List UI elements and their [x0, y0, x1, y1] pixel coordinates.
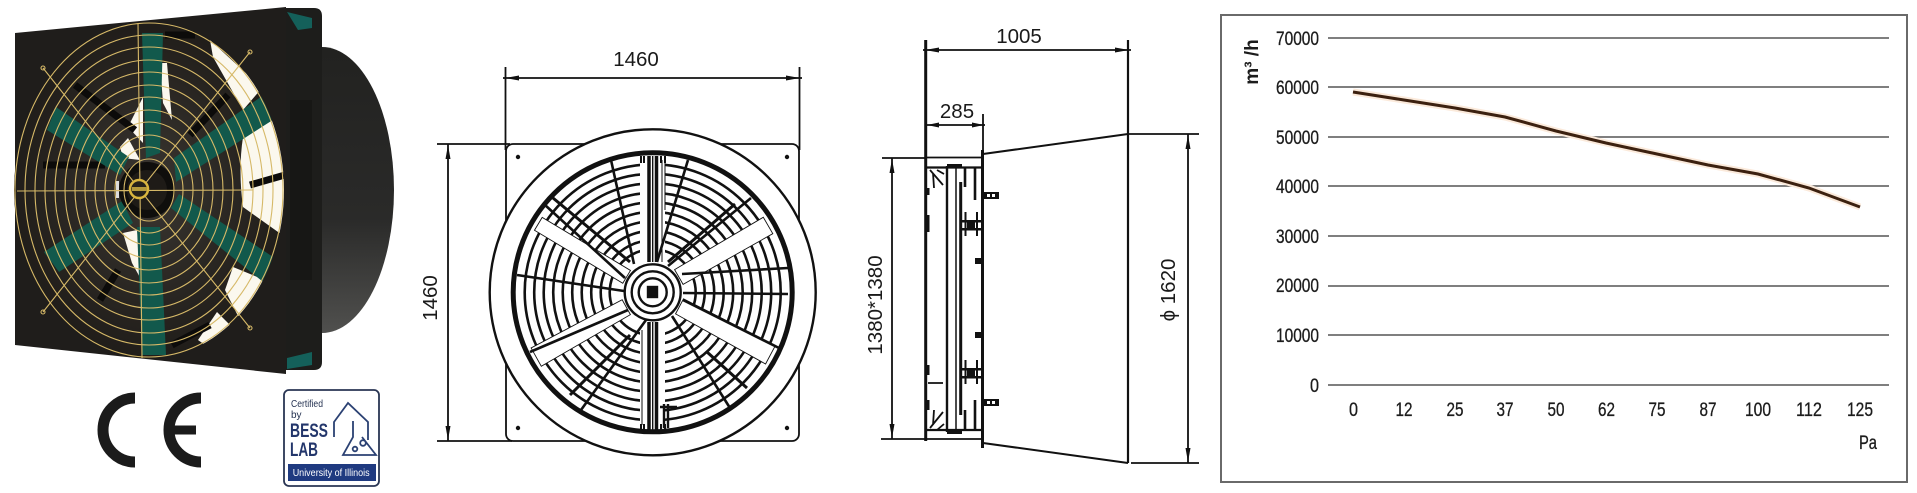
BESS lab certification badge: BESS: [290, 421, 328, 442]
y axis unit: m³ /h: [1242, 39, 1263, 85]
x axis unit: Pa: [1859, 433, 1877, 454]
y axis labels: 10000: [1276, 326, 1319, 347]
BESS lab certification badge: [284, 390, 379, 486]
inner frame detail: [928, 166, 975, 432]
frame height dimension: 1380*1380: [864, 255, 887, 355]
grid lines: [1328, 38, 1889, 385]
side body outline: [926, 40, 1128, 463]
gold centre badge: [130, 180, 148, 198]
y axis labels: 40000: [1276, 177, 1319, 198]
front dimension width: [503, 48, 802, 150]
x axis labels: 75: [1648, 400, 1666, 421]
x axis labels: 62: [1598, 400, 1615, 421]
front dimension height: [419, 144, 512, 441]
frame depth dimension: [926, 100, 985, 150]
wire guard: [15, 23, 283, 358]
performance chart: [1221, 15, 1907, 482]
airflow curve: [1353, 92, 1860, 207]
frame depth dimension: 285: [940, 100, 974, 123]
side view drawing: [864, 25, 1199, 463]
mounting holes: [516, 155, 789, 430]
teal blades: [44, 33, 279, 355]
square mounting plate: [506, 144, 799, 441]
x axis labels: 112: [1796, 400, 1822, 421]
motor terminal: [660, 404, 677, 428]
y axis labels: 0: [1310, 376, 1319, 397]
y axis labels: [1276, 29, 1319, 397]
fan front panel: [15, 7, 286, 374]
x axis labels: [1349, 400, 1873, 421]
x axis labels: 25: [1446, 400, 1464, 421]
BESS lab certification badge: University of Illinois: [293, 468, 370, 479]
x axis labels: 100: [1745, 400, 1771, 421]
x axis labels: 12: [1396, 400, 1412, 421]
guard rings: [513, 153, 792, 432]
fan opening with blades: [14, 22, 285, 358]
x axis labels: 50: [1548, 400, 1564, 421]
outer ring: [490, 129, 816, 455]
y axis labels: 20000: [1276, 276, 1319, 297]
teal brackets: [287, 12, 312, 369]
house and flask icon: [334, 403, 376, 455]
overall depth dimension: 1005: [996, 25, 1042, 48]
frame height dimension: [864, 158, 926, 439]
overall depth dimension: [923, 25, 1131, 52]
fan blades: [531, 156, 775, 428]
side brackets: [960, 192, 999, 406]
guard spokes: [517, 160, 788, 410]
white background seen through fan: [120, 40, 285, 345]
vertical support posts: [641, 156, 665, 432]
y axis labels: 60000: [1276, 78, 1319, 99]
chart frame: [1221, 15, 1907, 482]
hub: [119, 162, 175, 218]
BESS lab certification badge: Certified: [291, 399, 323, 410]
fan rear panel: [286, 8, 322, 370]
y axis labels: 30000: [1276, 227, 1319, 248]
front view drawing: [419, 48, 816, 455]
dome cone outline: [983, 134, 1128, 463]
y axis labels: 70000: [1276, 29, 1319, 50]
fan dome: [250, 47, 394, 333]
x axis labels: 0: [1349, 400, 1358, 421]
x axis labels: 125: [1847, 400, 1873, 421]
BESS lab certification badge: LAB: [290, 440, 318, 461]
front dimension height: 1460: [419, 275, 442, 321]
x axis labels: 37: [1496, 400, 1514, 421]
dark rear blades: [43, 35, 285, 345]
front dimension width: 1460: [613, 48, 659, 71]
lattice cross bands: [553, 198, 747, 395]
CE mark: [103, 398, 201, 462]
fan product photo: [14, 7, 394, 374]
y axis labels: 50000: [1276, 128, 1319, 149]
x axis labels: 87: [1700, 400, 1716, 421]
dome diameter dimension: ϕ 1620: [1157, 259, 1180, 321]
BESS lab certification badge: by: [291, 410, 302, 421]
centre hub: [625, 264, 681, 320]
dome diameter dimension: [1128, 134, 1199, 463]
